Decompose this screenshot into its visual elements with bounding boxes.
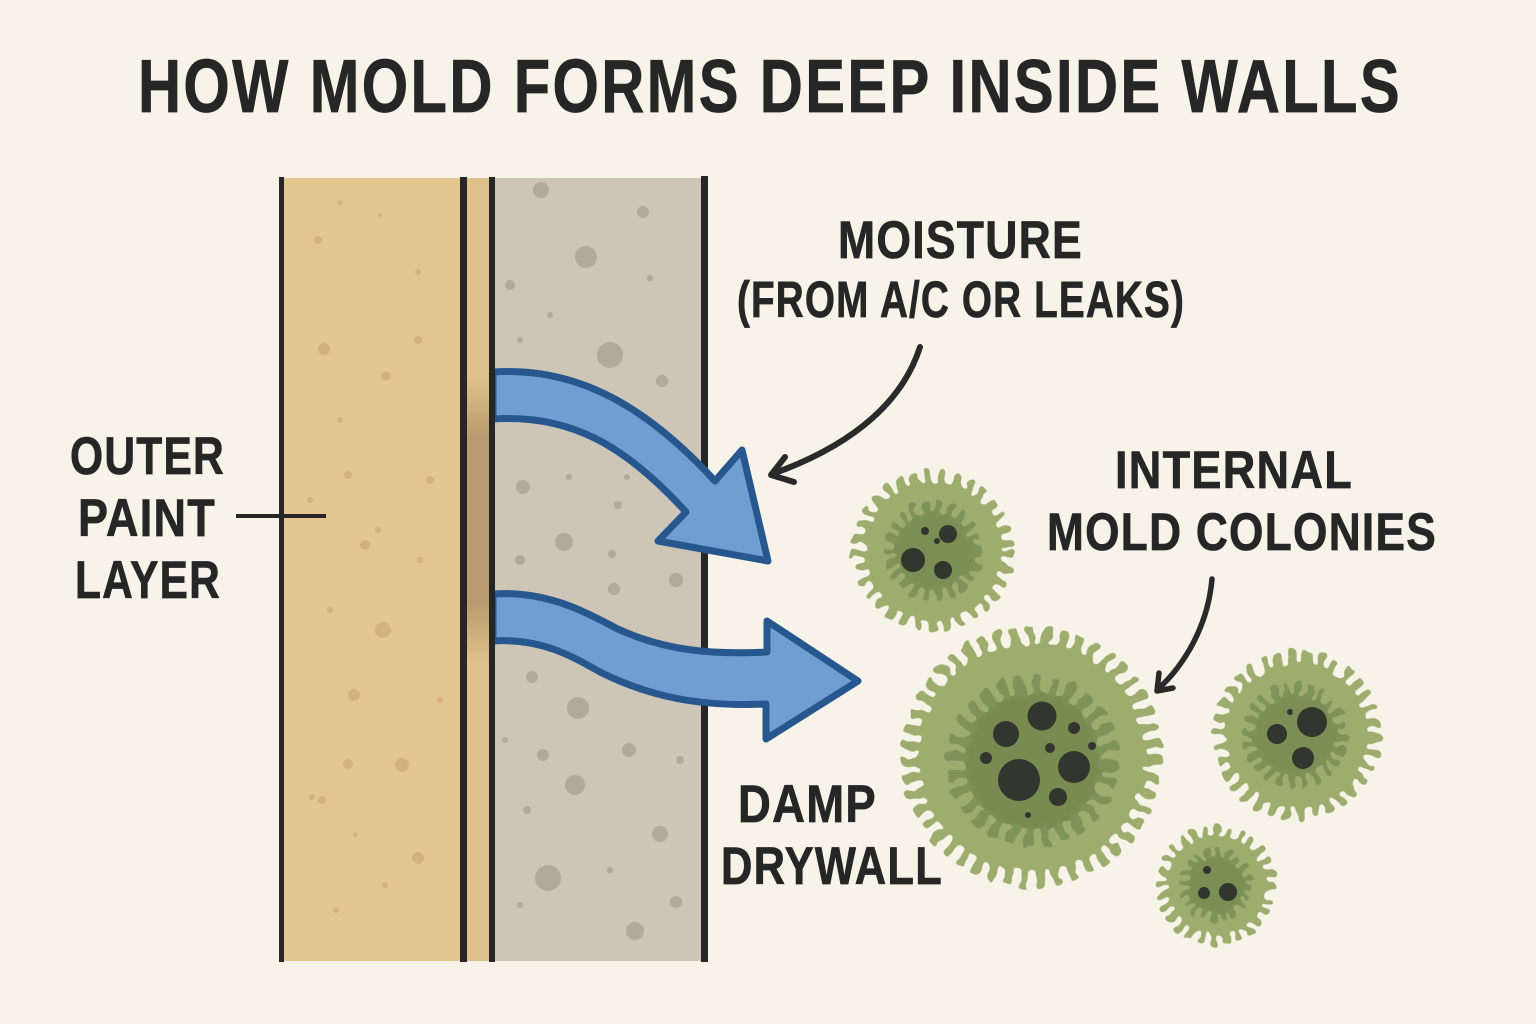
label: moisture: (FROM A/C OR LEAKS) xyxy=(737,271,1185,328)
label: outer paint layer xyxy=(70,427,225,610)
label: internal mold colonies: MOLD COLONIES xyxy=(1047,503,1437,562)
drywall speckles xyxy=(502,182,684,940)
label: moisture xyxy=(737,211,1185,328)
mold colony: large center xyxy=(912,637,1152,877)
outer paint layer panel xyxy=(282,178,463,961)
leader line: paint layer xyxy=(236,514,326,518)
wall outlines xyxy=(279,176,708,962)
label: damp drywall xyxy=(721,775,943,896)
mold colony: bottom xyxy=(1162,831,1270,939)
wall cross-section xyxy=(279,176,708,962)
arrow: mold pointer xyxy=(1157,579,1212,691)
arrow: moisture path lower xyxy=(493,594,858,739)
label: moisture: MOISTURE xyxy=(838,211,1083,270)
label: outer paint layer: LAYER xyxy=(75,551,221,610)
label: internal mold colonies: INTERNAL xyxy=(1115,441,1353,500)
drywall inner outline xyxy=(489,177,495,962)
label: internal mold colonies xyxy=(1047,441,1437,562)
label: damp drywall: DRYWALL xyxy=(721,837,943,896)
mold colony: top xyxy=(860,478,1006,624)
paint layer speckles xyxy=(307,200,443,913)
label: outer paint layer: PAINT xyxy=(78,489,216,548)
thin middle strip xyxy=(465,178,492,961)
mold colony: right xyxy=(1221,659,1373,811)
damp drywall panel xyxy=(494,178,703,961)
arrow: moisture path upper xyxy=(493,371,768,561)
label: outer paint layer: OUTER xyxy=(70,427,225,486)
label: damp drywall: DAMP xyxy=(738,775,877,834)
arrow: moisture pointer xyxy=(771,347,920,482)
